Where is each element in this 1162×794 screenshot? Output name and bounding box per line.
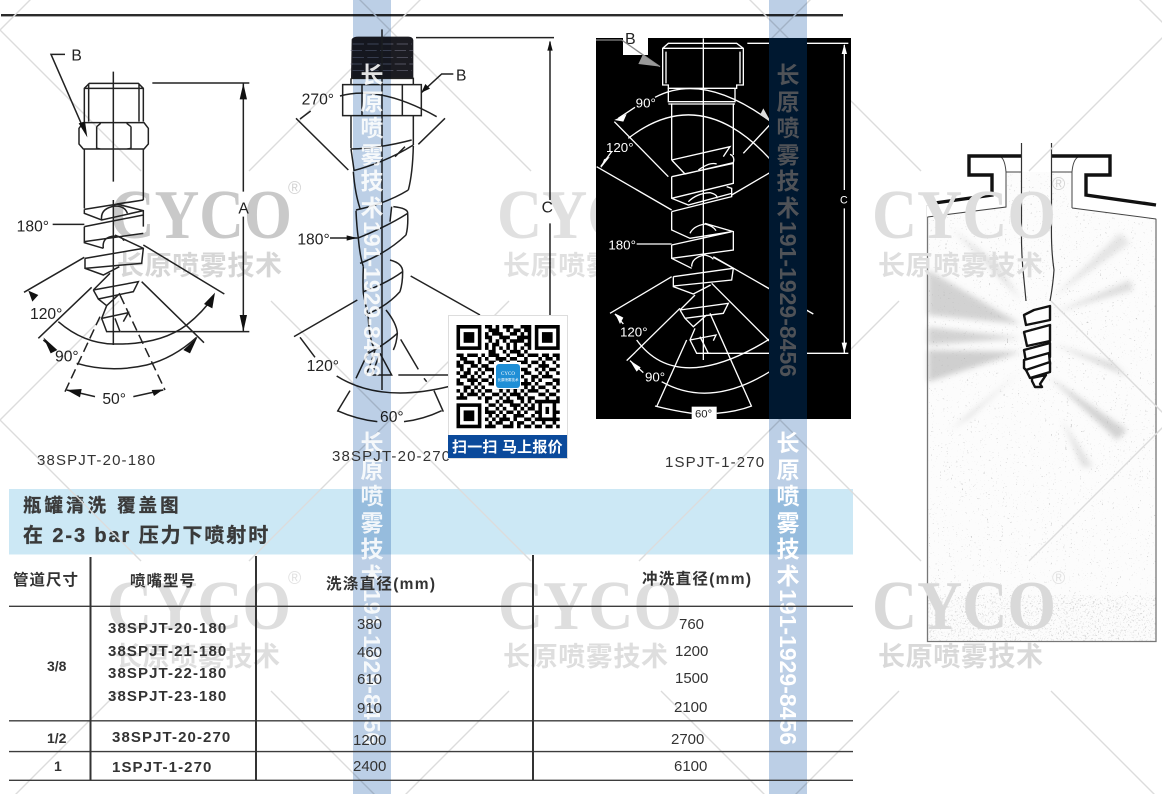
watermark: CYCO top right: CYCO [872, 177, 1056, 254]
row 1: 2400 [353, 758, 386, 775]
spiral flute 2 [356, 207, 408, 267]
row 1/2: 2700 [671, 731, 704, 748]
white neck wall [927, 160, 1158, 219]
strip left contact text upper: 长 [360, 62, 384, 88]
watermark: CYCO bottom right: ® [1052, 568, 1065, 588]
blue strip left [353, 0, 391, 794]
watermark: CYCO bottom right: CYCO [872, 568, 1056, 645]
row 3/8: 460 [357, 644, 382, 661]
dimension C [703, 43, 848, 353]
strip right contact text lower: 191-1929-8456 [775, 589, 801, 745]
watermark: CYCO bottom left: CYCO [107, 568, 291, 645]
strip right contact text upper: 术 [776, 195, 800, 221]
spiral tip [680, 295, 728, 353]
lance tube [1021, 143, 1054, 301]
watermark: CYCO bottom left: ® [288, 568, 301, 588]
strip right contact text upper [775, 62, 801, 377]
strip right contact text upper: 长 [776, 62, 800, 88]
60 degree [655, 313, 752, 413]
caption 38SPJT-20-180: 38SPJT-20-180 [37, 452, 156, 469]
diagram: 1SPJT-1-270 black panel: 90° [636, 95, 656, 110]
strip left contact text lower [359, 430, 385, 745]
helical coil [84, 200, 143, 275]
strip left contact text lower: 雾 [360, 510, 384, 536]
data table [9, 555, 853, 780]
watermark: CYCO bottom left: 长原喷雾技术 [115, 642, 281, 672]
QR centre logo [494, 362, 521, 389]
strip left contact text upper: 技 [360, 168, 384, 194]
strip left contact text lower: 长 [360, 430, 384, 456]
diagram: 38SPJT-20-270 nozzle: C [542, 200, 553, 217]
120 degree lines and arc [24, 245, 224, 344]
diagram: 1SPJT-1-270 black panel: 120° [606, 140, 634, 155]
spiral tip [93, 273, 138, 332]
diagram: 38SPJT-20-270 nozzle [294, 29, 554, 426]
strip right contact text lower: 长 [776, 430, 800, 456]
spiral flute 3 [363, 260, 403, 318]
blue strip right [769, 0, 807, 794]
row 3/8: 1200 [675, 643, 708, 660]
strip right contact text upper: 技 [776, 168, 800, 194]
spray rays [928, 230, 1133, 467]
strip right contact text lower: 技 [776, 536, 800, 562]
watermark: CYCO bottom middle: CYCO [498, 568, 682, 645]
QR call-to-action bar: 扫一扫 马上报价 [452, 438, 563, 456]
spiral flute 1 [351, 140, 413, 210]
helical coil [672, 147, 734, 294]
header: rinse diameter: 冲洗直径(mm) [642, 570, 752, 588]
diagram: 38SPJT-20-270 nozzle: 180° [297, 231, 330, 248]
body [672, 103, 733, 160]
label B and leader [421, 74, 453, 93]
strip left contact text upper: 喷 [360, 115, 384, 141]
neck [668, 88, 735, 104]
strip left contact text lower: 术 [360, 563, 384, 589]
120 degree lines and arc [294, 276, 480, 393]
watermark: CYCO top middle: CYCO [497, 177, 681, 254]
180 degree label [330, 236, 357, 240]
strip left contact text upper: 雾 [360, 142, 384, 168]
diagram: 1SPJT-1-270 black panel: 90° [645, 369, 665, 384]
caption 38SPJT-20-270: 38SPJT-20-270 [332, 448, 451, 465]
heading line 2: 在 2-3 bar 压力下喷射时 [23, 524, 270, 547]
diagram: 1SPJT-1-270 black panel: 180° [608, 237, 636, 252]
nozzle head [663, 43, 743, 88]
strip left contact text upper [359, 62, 385, 377]
dimension A [121, 83, 249, 332]
upper 90 degree [614, 89, 773, 177]
strip right contact text upper: 191-1929-8456 [775, 221, 801, 377]
50 degree lines and arc [65, 295, 165, 392]
thick neck profile [928, 156, 1156, 205]
diagram: 1SPJT-1-270 black panel: C [840, 194, 848, 206]
row 3/8: 610 [357, 671, 382, 688]
row 3/8: 38SPJT-22-180 [108, 665, 227, 682]
table rules [9, 606, 853, 780]
strip right contact text lower: 原 [776, 457, 800, 483]
strip right contact text lower [775, 430, 801, 745]
body [351, 116, 413, 148]
label B leader [596, 40, 660, 67]
strip right contact text upper: 喷 [776, 115, 800, 141]
coverage table heading band [9, 489, 853, 554]
watermark: CYCO top middle: 长原喷雾技术 [503, 251, 669, 281]
strip left contact text upper: 原 [360, 89, 384, 115]
header: washing diameter: 洗涤直径(mm) [326, 575, 436, 593]
strip left contact text lower: 喷 [360, 483, 384, 509]
row 3/8: 3/8 [47, 658, 67, 674]
watermark: CYCO top right: 长原喷雾技术 [878, 251, 1044, 281]
row 1/2: 38SPJT-20-270 [112, 729, 231, 746]
QR code [456, 327, 560, 426]
row 1: 1SPJT-1-270 [112, 759, 212, 776]
strip right contact text upper: 雾 [776, 142, 800, 168]
strip right contact text upper: 原 [776, 89, 800, 115]
QR centre logo: CYCO [501, 372, 515, 377]
watermark: CYCO top left: 长原喷雾技术 [117, 251, 283, 281]
strip right contact text lower: 雾 [776, 510, 800, 536]
diagram: 38SPJT-20-180 nozzle: 50° [102, 391, 126, 408]
270 degree label and arc [296, 93, 445, 170]
thread block [351, 37, 413, 78]
diagram: 38SPJT-20-180 nozzle: 180° [17, 218, 49, 235]
row 1: 6100 [674, 758, 707, 775]
diagram: 38SPJT-20-270 nozzle: 270° [302, 91, 334, 108]
QR call-to-action bar [448, 435, 567, 458]
lower 90 degree [627, 283, 792, 393]
nut [343, 78, 421, 116]
nozzle coil [1024, 306, 1050, 387]
watermark: CYCO bottom middle: ® [679, 568, 692, 588]
body [84, 149, 143, 208]
row 1 [54, 758, 707, 776]
row 3/8 [47, 616, 708, 717]
strip left contact text upper: 191-1929-8456 [359, 221, 385, 377]
row 3/8: 2100 [674, 699, 707, 716]
row 3/8: 910 [357, 700, 382, 717]
row 3/8: 38SPJT-21-180 [108, 643, 227, 660]
watermark: CYCO bottom right: 长原喷雾技术 [878, 642, 1044, 672]
lower 120 degree [610, 257, 813, 368]
bottle interior [928, 172, 1156, 641]
strip left contact text lower: 技 [360, 536, 384, 562]
diagram: 1SPJT-1-270 black panel: 60° [695, 408, 712, 420]
heading line 1: 瓶罐清洗 覆盖图 [23, 495, 182, 516]
diagram: 38SPJT-20-270 nozzle: 60° [380, 409, 404, 426]
threaded head [84, 83, 143, 122]
watermark: CYCO top right: ® [1052, 174, 1065, 194]
hex nut [79, 123, 148, 149]
QR code card [448, 316, 568, 458]
row 1: 1 [54, 758, 62, 774]
diagram: 38SPJT-20-180 nozzle: 120° [30, 306, 62, 323]
thin inner neck outline [928, 157, 1156, 219]
diagram: 38SPJT-20-180 nozzle: A [238, 200, 249, 217]
spiral tip [366, 310, 397, 375]
bottle speckle texture [928, 172, 1156, 641]
strip right contact text lower: 喷 [776, 483, 800, 509]
row 1/2: 1/2 [47, 730, 67, 746]
label B and leader [51, 54, 83, 128]
row 3/8: 760 [679, 616, 704, 633]
upper 120 degree [597, 115, 780, 210]
top rule [1, 14, 843, 16]
bottle spray coverage illustration [927, 143, 1158, 642]
column dividers [90, 555, 533, 780]
row 1/2 [47, 729, 704, 749]
header: nozzle model: 喷嘴型号 [130, 572, 196, 590]
QR centre logo: 长原喷雾技术 [498, 377, 519, 382]
180 degree label [637, 242, 672, 246]
strip left contact text lower: 原 [360, 457, 384, 483]
notch label B: B [625, 31, 636, 48]
row 3/8: 38SPJT-23-180 [108, 688, 227, 705]
centre line [380, 29, 384, 390]
bottom speckle band [928, 595, 1156, 641]
60 degree lines and arc [337, 339, 443, 422]
dimension C [416, 38, 554, 320]
diagram: 38SPJT-20-270 nozzle: 120° [307, 358, 339, 375]
row 3/8: 1500 [675, 670, 708, 687]
row 3/8: 38SPJT-20-180 [108, 620, 227, 637]
centre line [701, 38, 705, 360]
bottle outer walls [928, 205, 1156, 642]
strip left contact text upper: 术 [360, 195, 384, 221]
black background with notch [596, 38, 851, 419]
strip left contact text lower: 191-1929-8456 [359, 589, 385, 745]
centre line [111, 72, 116, 345]
strip right over black panel [769, 38, 807, 419]
diagram: 38SPJT-20-180 nozzle [17, 48, 249, 408]
watermark: CYCO top right [872, 174, 1065, 281]
diagram: 38SPJT-20-270 nozzle: B [456, 67, 466, 84]
diagram: 38SPJT-20-180 nozzle: 90° [55, 348, 79, 365]
row 1/2: 1200 [353, 732, 386, 749]
row 3/8: 380 [357, 616, 382, 633]
watermark: CYCO bottom middle: 长原喷雾技术 [503, 642, 669, 672]
strip right contact text lower: 术 [776, 563, 800, 589]
caption 1SPJT-1-270: 1SPJT-1-270 [665, 454, 765, 471]
header: pipe size: 管道尺寸 [13, 570, 79, 589]
diagram: 38SPJT-20-180 nozzle: B [71, 48, 82, 65]
watermark: CYCO top left: CYCO [110, 177, 292, 254]
diagram: 1SPJT-1-270 black panel: 120° [620, 325, 648, 340]
180 degree label [53, 222, 84, 227]
watermark: CYCO top left: ® [288, 178, 301, 198]
watermark: CYCO top middle [497, 177, 681, 281]
90 degree lines and arc [38, 282, 204, 343]
diagram: 1SPJT-1-270 black panel [596, 31, 851, 420]
